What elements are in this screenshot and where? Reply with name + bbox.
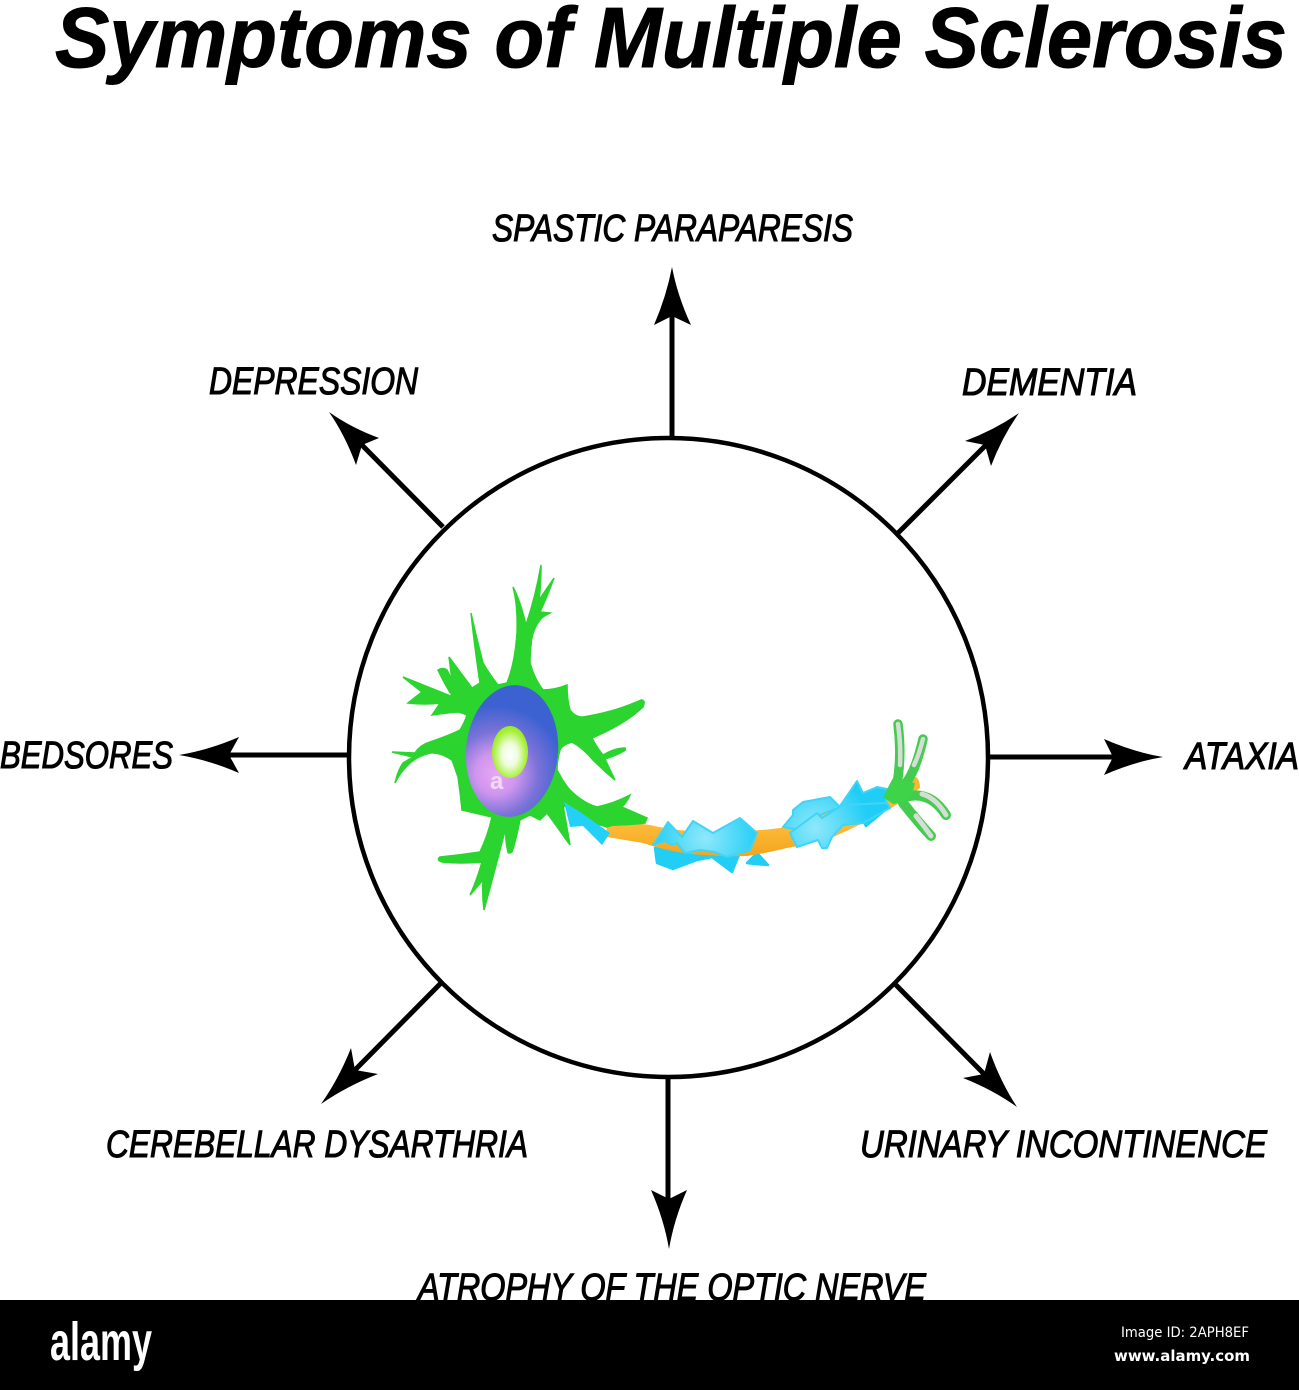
axon (606, 777, 920, 856)
arrow: dementia (898, 413, 1019, 533)
myelin sheath: pieces behind axon (610, 803, 890, 872)
arrow: urinary incontinence (895, 984, 1017, 1107)
nucleus (492, 726, 528, 778)
footer image id: Image ID: 2APH8EF (1121, 1325, 1249, 1341)
myelin sheath: first segment (564, 802, 610, 845)
dendrite tip over axon (602, 807, 647, 826)
terminal junction (883, 778, 915, 804)
label: depression: DEPRESSION (209, 361, 418, 403)
label: dementia: DEMENTIA (962, 362, 1137, 404)
arrow: ataxia (988, 739, 1163, 775)
footer url: www.alamy.com (1114, 1347, 1250, 1365)
label: cerebellar dysarthria: CEREBELLAR DYSARTHRIA (106, 1124, 528, 1166)
myelin sheath: third segment (783, 781, 890, 848)
axon terminals (883, 724, 946, 836)
central circle (349, 438, 988, 1077)
arrow: spastic paraparesis (654, 267, 691, 438)
myelin sheath: second segment (653, 818, 757, 857)
label: bedsores: BEDSORES (0, 735, 173, 777)
arrow: depression (329, 412, 443, 527)
label: spastic paraparesis: SPASTIC PARAPARESIS (492, 208, 853, 250)
arrow: bedsores (179, 737, 349, 773)
neuron body dendrites (392, 565, 647, 910)
footer bar (0, 1300, 1299, 1390)
arrow: atrophy of the optic nerve (651, 1077, 687, 1249)
neuron illustration (392, 565, 946, 910)
cell body (460, 681, 564, 821)
watermark glyph on cell body: a (490, 768, 504, 795)
footer logo: alamy (50, 1312, 152, 1372)
arrow: cerebellar dysarthria (321, 982, 442, 1104)
label: atrophy of the optic nerve: ATROPHY OF THE OPTIC NERVE (416, 1267, 927, 1309)
